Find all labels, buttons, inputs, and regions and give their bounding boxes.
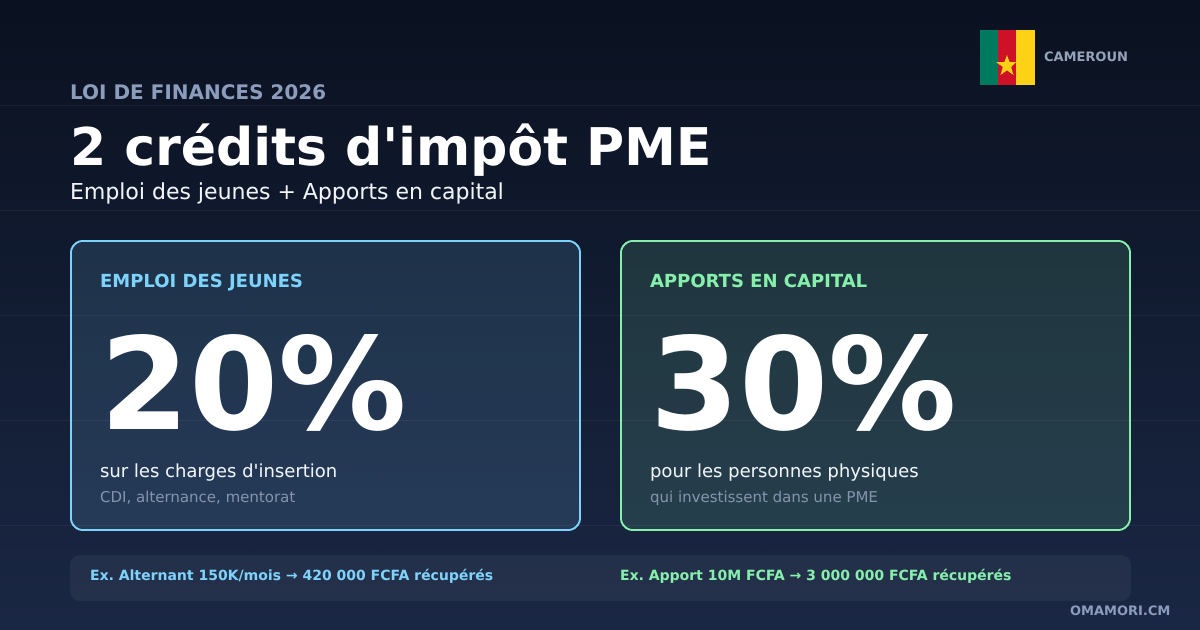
- big number: 30%: 30%: [650, 311, 956, 460]
- detail: apports: qui investissent dans une PME: [650, 488, 878, 506]
- example: apports: Ex. Apport 10M FCFA → 3 000 000 FCFA récupérés: [620, 568, 1011, 584]
- title: 2 crédits d'impôt PME: [70, 118, 711, 178]
- description: emploi: sur les charges d'insertion: [100, 461, 337, 482]
- panel: apports en capital: [621, 241, 1130, 530]
- icon: Cameroon flag: [980, 30, 1035, 85]
- card heading: emploi: EMPLOI DES JEUNES: [100, 271, 303, 292]
- source credit: OMAMORI.CM: [1070, 604, 1170, 619]
- panel: emploi des jeunes: [71, 241, 580, 530]
- big number: 20%: 20%: [100, 311, 406, 460]
- description: apports: pour les personnes physiques: [650, 461, 919, 482]
- country label: CAMEROUN: [1044, 50, 1128, 65]
- card heading: apports: APPORTS EN CAPITAL: [650, 271, 867, 292]
- eyebrow heading: LOI DE FINANCES 2026: [70, 80, 326, 104]
- subtitle: Emploi des jeunes + Apports en capital: [70, 180, 504, 205]
- example: emploi: Ex. Alternant 150K/mois → 420 000 FCFA récupérés: [90, 568, 493, 584]
- examples bar: [70, 555, 1131, 601]
- detail: emploi: CDI, alternance, mentorat: [100, 488, 295, 506]
